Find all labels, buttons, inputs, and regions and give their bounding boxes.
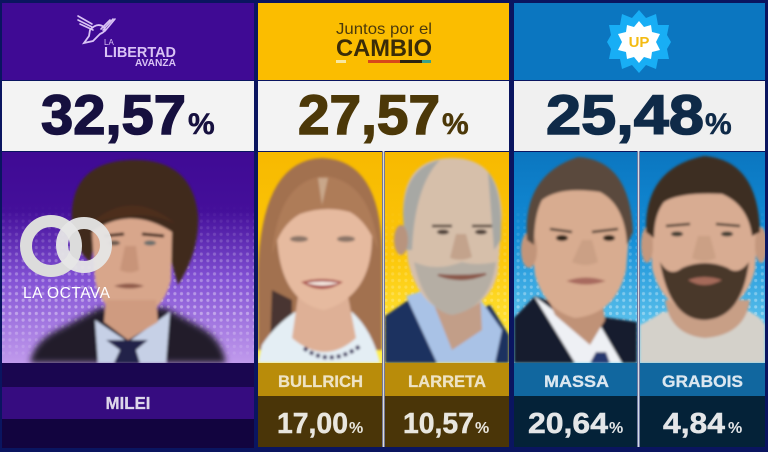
percentage: Larreta: % <box>475 420 489 437</box>
divider <box>382 151 384 447</box>
percentage: Larreta: 10,57 <box>403 408 474 440</box>
percentage: Bullrich <box>258 396 382 447</box>
name band: Larreta <box>385 363 509 396</box>
photo: Milei <box>2 152 254 363</box>
name band: Bullrich <box>258 363 382 396</box>
total percentage band: % <box>188 108 215 141</box>
party header band <box>514 3 765 80</box>
name band: Grabois <box>640 363 765 396</box>
total percentage band <box>514 81 765 151</box>
name band: Massa <box>514 363 637 396</box>
name band: Milei: MILEI <box>106 393 150 413</box>
party header band <box>2 3 254 80</box>
photo: Larreta <box>385 152 509 363</box>
logo: Juntos por el Cambio: CAMBIO <box>336 35 432 62</box>
name band: Milei <box>2 363 254 448</box>
icon: winged lion <box>78 16 115 43</box>
percentage: Bullrich: 17,00 <box>277 408 348 440</box>
percentage: Massa: % <box>609 420 623 437</box>
total percentage band: % <box>442 108 469 141</box>
percentage: Bullrich: % <box>349 420 363 437</box>
panel: La Libertad Avanza <box>2 3 254 448</box>
logo: UP sun <box>607 10 671 73</box>
total percentage band: % <box>705 108 732 141</box>
total percentage band: 32,57 <box>41 83 186 146</box>
photo: Massa <box>514 152 637 363</box>
total percentage band <box>2 81 254 151</box>
name band: Larreta: LARRETA <box>408 372 486 391</box>
percentage: Grabois <box>640 396 765 447</box>
logo: La Libertad Avanza: LA <box>104 38 114 47</box>
percentage: Larreta <box>385 396 509 447</box>
percentage: Grabois: 4,84 <box>663 408 725 440</box>
name band: Grabois: GRABOIS <box>662 372 743 391</box>
panel: Juntos por el Cambio <box>258 3 509 447</box>
watermark: La Octava: LA OCTAVA <box>23 285 111 302</box>
name band: Bullrich: BULLRICH <box>278 372 363 391</box>
total percentage band: 25,48 <box>546 83 704 146</box>
watermark: La Octava <box>23 221 111 302</box>
logo: Juntos por el Cambio: Juntos por el <box>336 21 432 38</box>
logo: La Libertad Avanza: AVANZA <box>135 58 176 69</box>
logo: La Libertad Avanza <box>78 16 176 69</box>
percentage: Grabois: % <box>728 420 742 437</box>
total percentage band: 27,57 <box>298 83 440 146</box>
logo: Juntos por el Cambio <box>336 21 432 63</box>
percentage: Massa: 20,64 <box>528 408 608 440</box>
percentage: Massa <box>514 396 637 447</box>
photo: Bullrich <box>258 152 382 363</box>
divider <box>638 151 640 447</box>
logo: La Libertad Avanza: LIBERTAD <box>104 45 176 61</box>
logo: UP sun: UP <box>629 34 649 51</box>
photo: Grabois <box>640 152 767 363</box>
total percentage band <box>258 81 509 151</box>
name band: Massa: MASSA <box>544 372 609 391</box>
party header band <box>258 3 509 80</box>
panel: Unión por la Patria <box>514 3 767 447</box>
